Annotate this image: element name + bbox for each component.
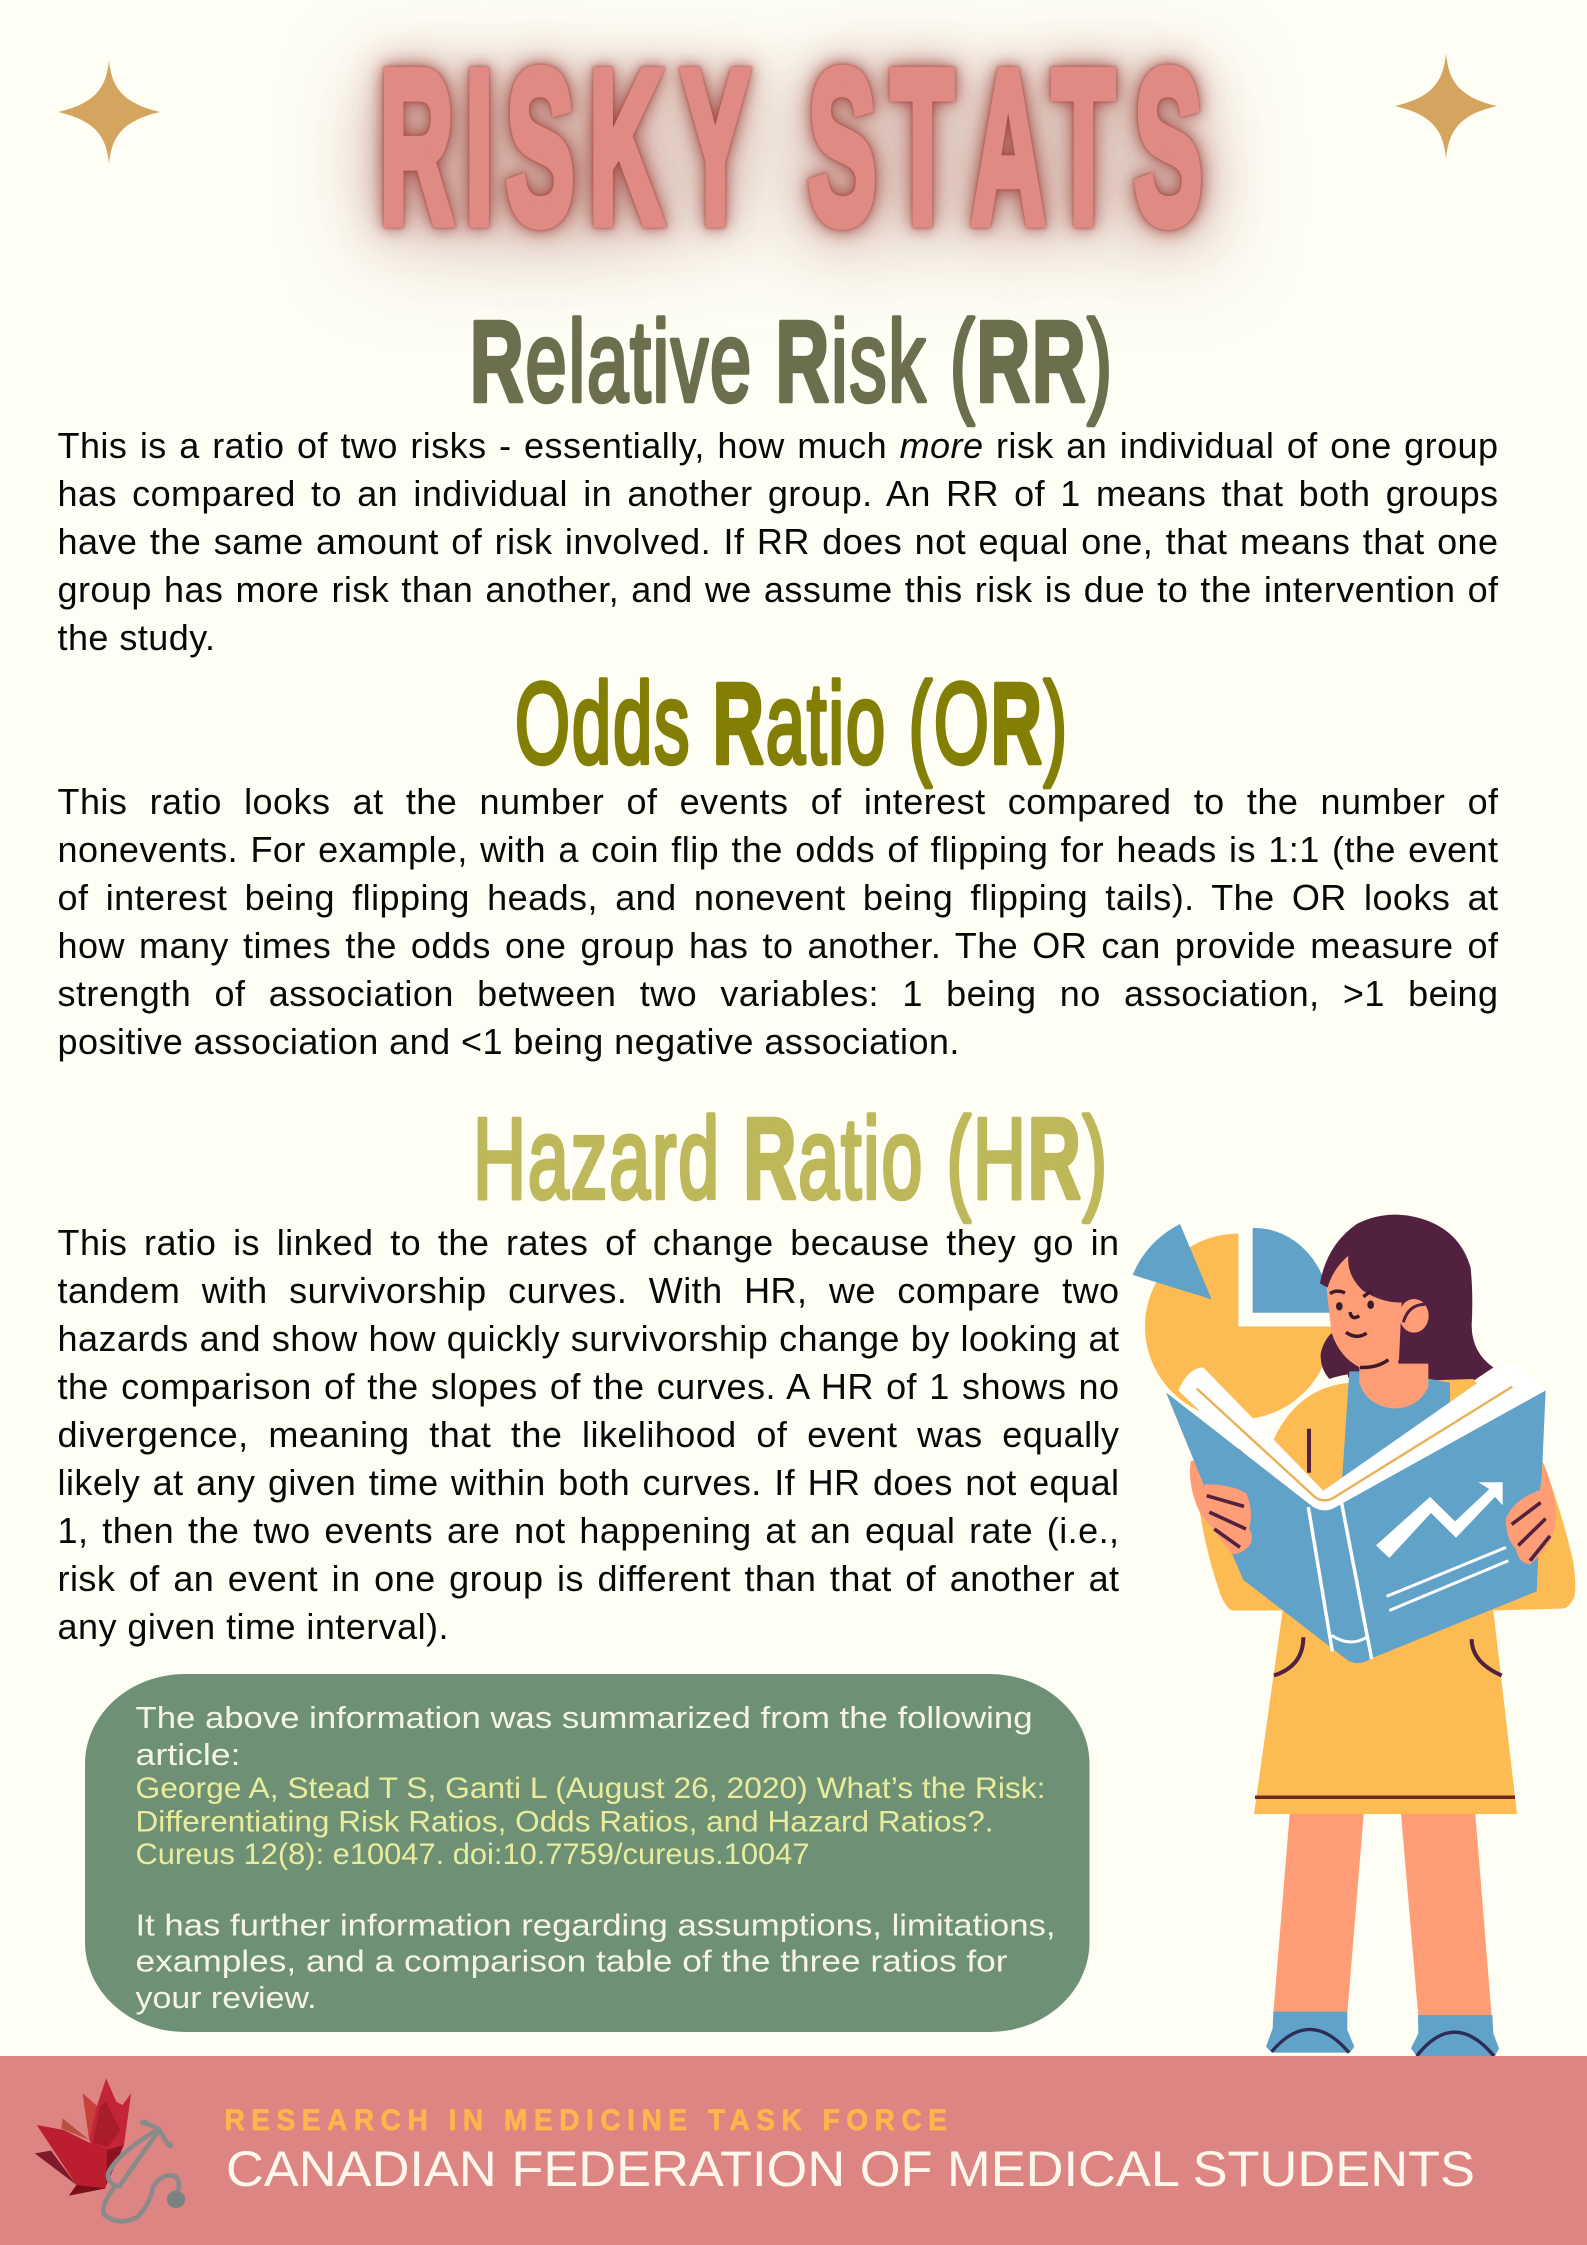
note intro text: article: bbox=[136, 1737, 240, 1772]
text block: hazard ratio: divergence, meaning that the likelihood of event was equally bbox=[58, 1414, 1120, 1455]
text block: odds ratio: of interest being flipping heads, and nonevent being flipping tails). The OR looks at bbox=[58, 877, 1498, 918]
note closing text bbox=[136, 1908, 1056, 2015]
book text lines bbox=[1387, 1547, 1508, 1610]
pie chart bbox=[1133, 1224, 1332, 1420]
text block: hazard ratio: likely at any given time within both curves. If HR does not equal bbox=[58, 1462, 1120, 1503]
legs, shoes and skirt hem bbox=[1266, 1810, 1499, 2056]
note closing text: examples, and a comparison table of the three ratios for bbox=[136, 1944, 1008, 1978]
note closing text: It has further information regarding assumptions, limitations, bbox=[136, 1908, 1056, 1942]
blue top bbox=[1342, 1371, 1450, 1486]
illustration: woman reading a book with charts bbox=[1133, 1215, 1575, 2056]
chart and figure bbox=[1133, 1215, 1575, 1814]
citation text: Cureus 12(8): e10047. doi:10.7759/cureus.10047 bbox=[136, 1838, 810, 1871]
text block: hazard ratio: hazards and show how quickly survivorship change by looking at bbox=[58, 1318, 1120, 1359]
face bbox=[1327, 1256, 1433, 1368]
logo: maple leaf with stethoscope bbox=[35, 2078, 185, 2221]
open book bbox=[1166, 1364, 1546, 1663]
text block: hazard ratio bbox=[58, 1222, 1120, 1647]
panel: source note bbox=[85, 1674, 1090, 2032]
text block: odds ratio bbox=[58, 781, 1498, 1062]
note closing text: your review. bbox=[136, 1980, 316, 2015]
text block: odds ratio: nonevents. For example, with a coin flip the odds of flipping for heads is 1:1 (the event bbox=[58, 829, 1498, 870]
footer band bbox=[0, 2056, 1587, 2245]
text block: hazard ratio: risk of an event in one group is different than that of another at bbox=[58, 1558, 1120, 1599]
text block: odds ratio: strength of association between two variables: 1 being no association, >1 being bbox=[58, 973, 1498, 1014]
text block: hazard ratio: This ratio is linked to the rates of change because they go in bbox=[58, 1222, 1120, 1263]
citation text: George A, Stead T S, Ganti L (August 26, 2020) What’s the Risk: bbox=[136, 1772, 1046, 1805]
text block: relative risk: group has more risk than another, and we assume this risk is due to the intervention of bbox=[58, 569, 1498, 610]
text block: hazard ratio: tandem with survivorship curves. With HR, we compare two bbox=[58, 1270, 1120, 1311]
hair back bbox=[1320, 1215, 1493, 1387]
text block: hazard ratio: any given time interval). bbox=[58, 1606, 449, 1647]
text block: relative risk: has compared to an individual in another group. An RR of 1 means that both groups bbox=[58, 473, 1498, 514]
title: RISKY STATS bbox=[379, 26, 1203, 270]
note intro text: The above information was summarized from the following bbox=[136, 1700, 1032, 1735]
footer task force line: RESEARCH IN MEDICINE TASK FORCE bbox=[224, 2104, 954, 2137]
citation text bbox=[136, 1772, 1046, 1871]
citation text: Differentiating Risk Ratios, Odds Ratios, and Hazard Ratios?. bbox=[136, 1806, 994, 1838]
footer federation line: CANADIAN FEDERATION OF MEDICAL STUDENTS bbox=[226, 2141, 1475, 2197]
jacket seam and pockets bbox=[1274, 1429, 1502, 1676]
text block: relative risk: have the same amount of risk involved. If RR does not equal one, that means that one bbox=[58, 521, 1498, 562]
icon: left sparkle star bbox=[58, 60, 160, 164]
neck bbox=[1359, 1348, 1428, 1408]
book chart arrow bbox=[1376, 1482, 1503, 1558]
text block: hazard ratio: 1, then the two events are not happening at an equal rate (i.e., bbox=[58, 1510, 1120, 1551]
text block: relative risk: This is a ratio of two risks - essentially, how much more risk an individual of one group bbox=[58, 425, 1499, 466]
text block: relative risk: the study. bbox=[58, 617, 215, 658]
heading: Odds Ratio: Odds Ratio (OR) bbox=[515, 660, 1069, 788]
left arm skin bbox=[1190, 1448, 1243, 1553]
heading: Hazard Ratio: Hazard Ratio (HR) bbox=[473, 1095, 1109, 1223]
dress and sleeves bbox=[1191, 1379, 1575, 1814]
heading: Relative Risk: Relative Risk (RR) bbox=[470, 298, 1114, 426]
note intro text bbox=[136, 1700, 1032, 1772]
text block: odds ratio: This ratio looks at the number of events of interest compared to the number of bbox=[58, 781, 1498, 822]
text block: odds ratio: positive association and <1 being negative association. bbox=[58, 1021, 960, 1062]
skirt hem line bbox=[1255, 1796, 1515, 1799]
hands bbox=[1200, 1463, 1556, 1565]
text block: relative risk bbox=[58, 425, 1499, 658]
text block: odds ratio: how many times the odds one group has to another. The OR can provide measure of bbox=[58, 925, 1498, 966]
icon: right sparkle star bbox=[1395, 53, 1497, 159]
text block: hazard ratio: the comparison of the slopes of the curves. A HR of 1 shows no bbox=[58, 1366, 1120, 1407]
